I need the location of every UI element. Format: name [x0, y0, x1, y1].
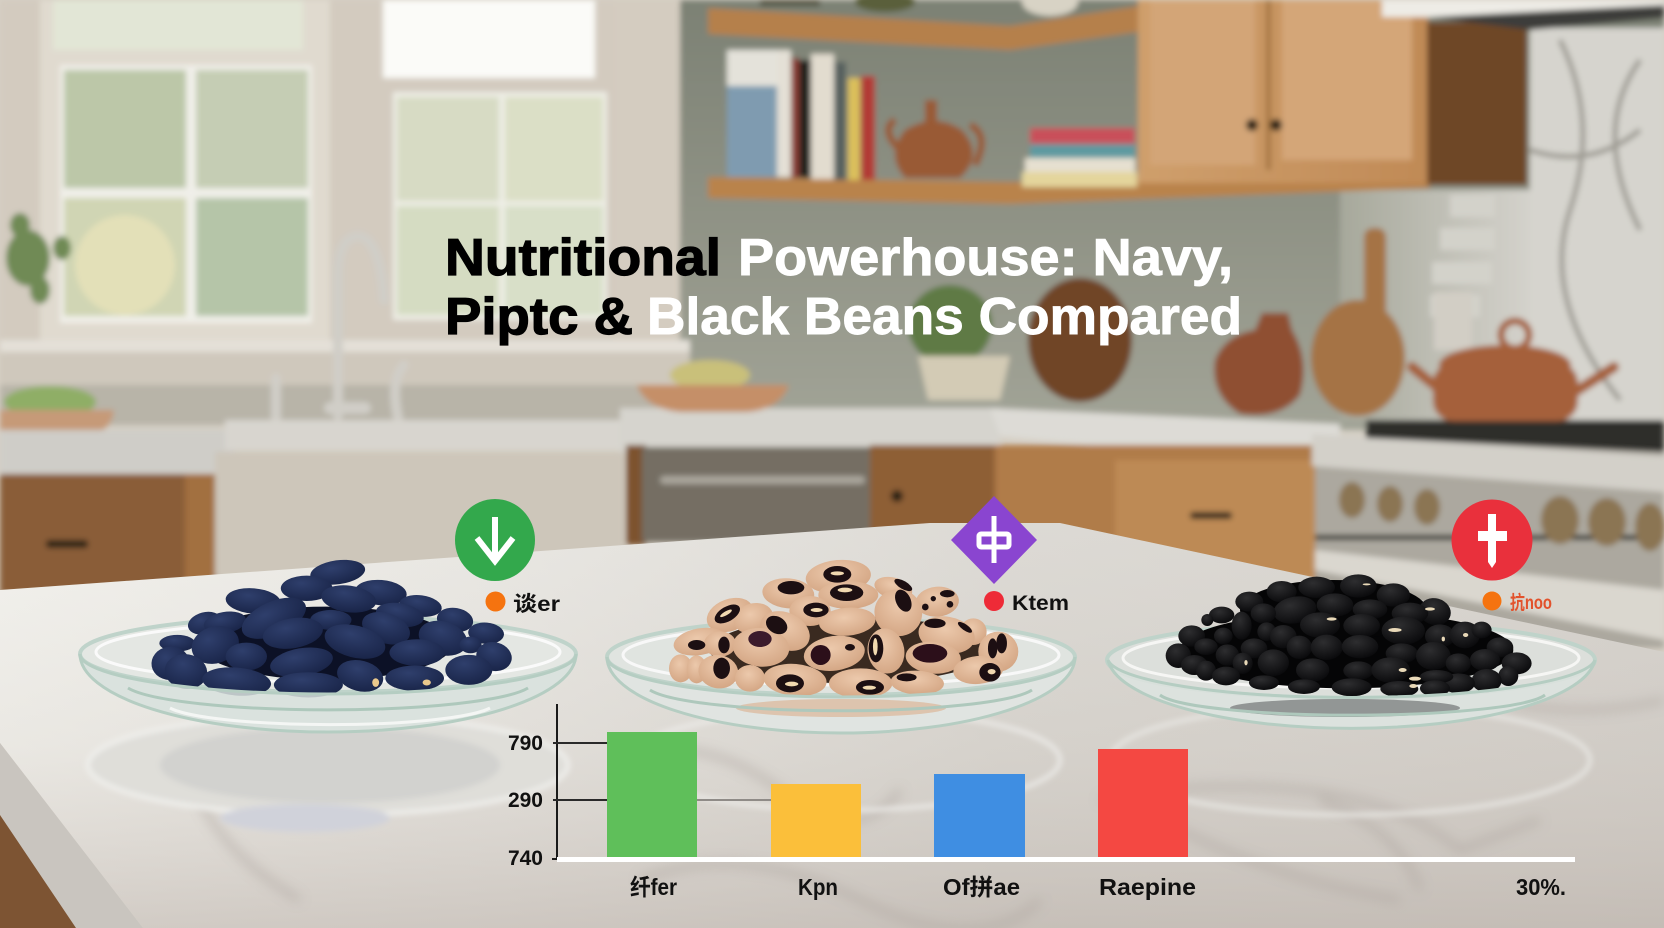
legend: navy label: 谈er [513, 593, 560, 616]
category labels: 纤fer [630, 874, 677, 900]
icon: red cross badge [1452, 500, 1532, 580]
plate reflections on counter [88, 705, 1590, 832]
category labels: Of拼ae [943, 874, 1020, 900]
y axis labels: 790 [508, 732, 543, 755]
legend: navy label [486, 592, 560, 616]
faucet [276, 236, 404, 418]
category labels: 30%. [1516, 874, 1566, 900]
upper cabinets [1138, 0, 1428, 183]
pinto beans plate [607, 557, 1075, 733]
black beans plate [1107, 574, 1595, 728]
bar: red [1098, 749, 1188, 857]
category labels: Raepine [1099, 874, 1196, 900]
title: Powerhouse: Navy, [738, 229, 1233, 287]
category labels: Kpn [798, 874, 838, 900]
legend: black label [1482, 591, 1552, 614]
y axis labels: 290 [508, 789, 543, 812]
glass rim: pinto [607, 657, 1075, 733]
y axis labels [508, 732, 543, 870]
beans: black [1166, 574, 1532, 697]
title: Black Beans Compared [647, 288, 1242, 346]
sill and backsplash [0, 340, 690, 352]
beans: navy [149, 557, 515, 698]
chart axes [552, 704, 1575, 862]
far counters [0, 430, 235, 476]
lower cabinets [0, 474, 218, 594]
title: Nutritional [445, 229, 721, 287]
left salad plate [4, 386, 96, 418]
glass plate: navy [80, 616, 576, 732]
title [445, 229, 1242, 346]
glass rim: black [1108, 660, 1595, 728]
glass plate: pinto [607, 619, 1075, 733]
marble backsplash [1340, 190, 1540, 420]
category labels [630, 874, 1566, 900]
navy beans plate [80, 557, 576, 732]
bar: yellow [771, 784, 861, 857]
y axis labels: 740 [508, 847, 543, 870]
plant [6, 213, 71, 304]
bar: green [607, 732, 697, 857]
icon: green down arrow badge [455, 499, 535, 581]
glass plate: black [1107, 622, 1595, 728]
beans: pinto [669, 557, 1018, 699]
legend: black label: 抗noo [1510, 591, 1552, 614]
glass rim: navy [80, 654, 576, 732]
left window [40, 0, 330, 345]
stove [1315, 438, 1664, 648]
icon: purple diamond plus badge [951, 496, 1037, 584]
title: Piptc & [445, 288, 633, 346]
legend: pinto label: Ktem [1012, 592, 1069, 615]
bar chart [508, 704, 1575, 900]
teapot [895, 121, 973, 178]
upper shelves [708, 6, 1138, 50]
bar: blue [934, 774, 1025, 857]
right window [383, 0, 595, 78]
books [727, 50, 777, 177]
fruit bowl [670, 360, 750, 390]
wall decor: cutting boards, vases [1028, 278, 1132, 402]
marble island countertop [0, 523, 1664, 928]
window wall [0, 0, 1664, 648]
legend: pinto label [984, 591, 1069, 615]
